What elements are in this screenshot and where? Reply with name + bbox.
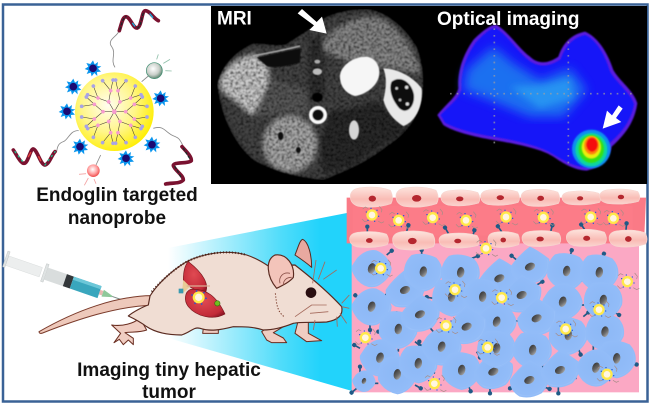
imaging beam [168, 212, 352, 391]
panel: tumor tissue [347, 187, 647, 397]
endothelial cells: bottom [350, 229, 647, 250]
nanoprobes in vessel and tumor [355, 206, 639, 392]
heading: imaging tiny hepatic tumor: Imaging tiny hepatic [77, 360, 261, 381]
icon: nanoprobe [13, 11, 191, 185]
blood vessel [347, 198, 646, 243]
optical glow [437, 25, 637, 171]
eye [306, 287, 316, 298]
MRI label: MRI [217, 8, 252, 30]
vessel receptors [365, 221, 629, 237]
text: nanoprobe line two: nanoprobe [68, 208, 166, 229]
body [128, 252, 342, 335]
gray reporter ball [146, 54, 172, 79]
MRI dark gut band and bright rim [257, 48, 301, 67]
hind foot [112, 318, 147, 345]
tumor hot spot [572, 130, 611, 168]
MRI bright stomach [340, 57, 379, 96]
near ear [268, 255, 294, 288]
cheek stitches [275, 293, 285, 317]
optical grid dots [450, 28, 635, 167]
red reporter ball [79, 164, 100, 185]
optical arrow [603, 105, 623, 129]
MRI arrow [298, 9, 327, 34]
panel: MRI image [211, 6, 431, 184]
heading: nanoprobe: Endoglin targeted [36, 185, 198, 206]
text: tumor: tumor [142, 382, 197, 403]
far ear [295, 239, 312, 267]
tissue receptors [349, 248, 639, 395]
dye stars [59, 60, 169, 166]
illustration: mouse [39, 239, 349, 345]
front feet [203, 320, 322, 343]
tail [39, 296, 152, 333]
tumor cells [352, 247, 635, 397]
linkers [57, 32, 183, 165]
core [75, 72, 154, 151]
MRI body tissue [217, 9, 423, 180]
peptide ligands [13, 11, 191, 184]
panel: optical imaging [431, 6, 647, 184]
icon: syringe [2, 250, 131, 310]
whiskers [295, 260, 349, 330]
liver [179, 262, 225, 317]
MRI bowel [383, 68, 422, 126]
optical label: Optical imaging [437, 9, 580, 30]
endothelial cells: top [350, 187, 640, 207]
MRI spine ring [278, 60, 359, 153]
back fur ticks [152, 252, 247, 292]
